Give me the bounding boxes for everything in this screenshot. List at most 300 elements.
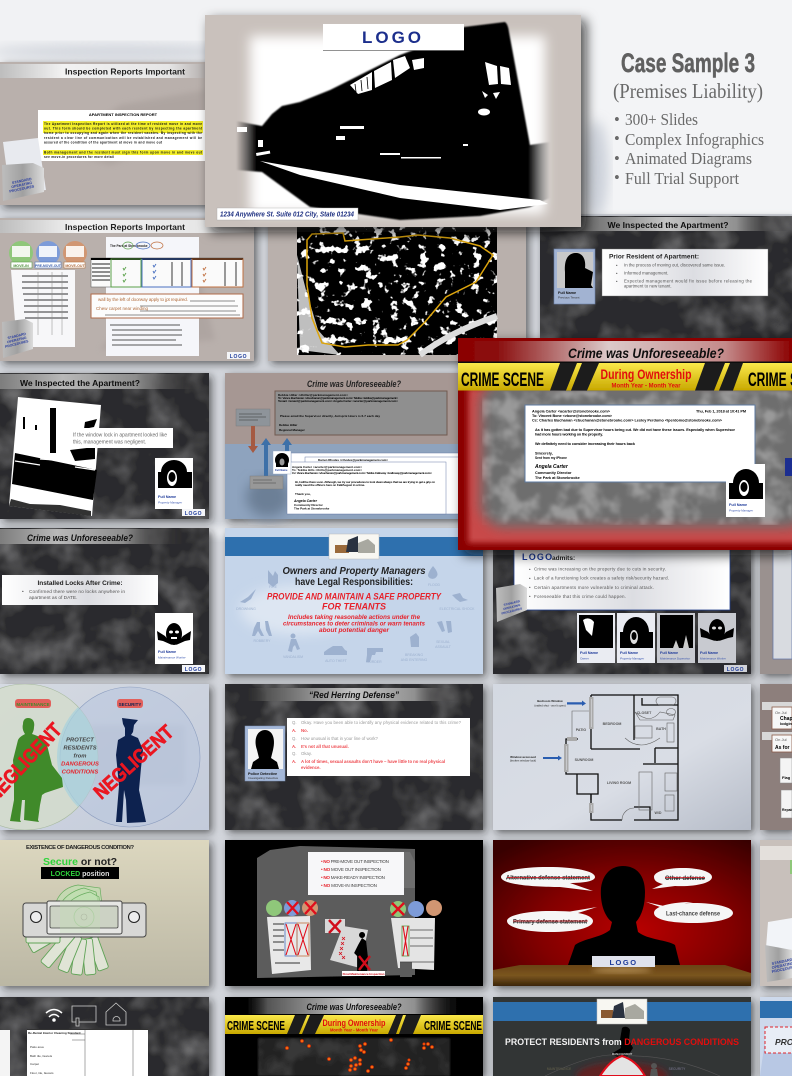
form documents: Re-Rental Interior Cleaning Standard xyxy=(28,1031,81,1035)
email stack: Angela Carter <acarter@parkmanagement.com> xyxy=(292,465,362,469)
question and answer testimony: No. xyxy=(301,728,308,733)
card: property manager: Full Name xyxy=(620,651,638,655)
triangle diagram xyxy=(545,1052,720,1076)
faint hazard icons: ROBBERY xyxy=(253,639,271,643)
title bar: Crime was Unforeseeable? xyxy=(306,1002,402,1012)
admits box: • xyxy=(529,594,531,599)
lock body xyxy=(23,900,146,937)
faint hazard icons xyxy=(236,566,475,664)
maintenance pill: MAINTENANCE xyxy=(16,702,50,707)
form documents: Carpet xyxy=(30,1062,39,1066)
question and answer testimony: A. xyxy=(292,728,296,733)
admits box: Crime was increasing on the property due to cuts in security. xyxy=(534,566,666,572)
binder: PROCEDURES xyxy=(5,339,30,349)
title bar xyxy=(0,529,190,544)
email: gray background xyxy=(275,391,447,435)
arrow: bedroom window: (nailed shut - won't open) xyxy=(534,704,566,708)
heading: Owners and Property Managers xyxy=(282,566,426,577)
speech bubble: alternative defense: Alternative defense statement xyxy=(506,876,590,882)
paper xyxy=(766,918,792,950)
installed locks box: • xyxy=(22,590,24,595)
faint hazard icons: ELECTRICAL SHOCK xyxy=(440,607,475,611)
negligent stamp right: NEGLIGENT xyxy=(90,721,178,804)
question and answer testimony: Q. xyxy=(292,751,297,756)
faint hazard icons: FLOOD xyxy=(428,583,440,587)
binder: OPERATING xyxy=(7,336,27,344)
security guard silhouette xyxy=(116,718,146,823)
right circle xyxy=(60,687,200,827)
small gray note lower xyxy=(250,476,283,489)
slide: existence of dangerous condition xyxy=(0,840,209,986)
blue band xyxy=(493,1002,751,1021)
feature list: • xyxy=(614,168,620,187)
admits box: Certain apartments more vulnerable to criminal attack. xyxy=(534,585,654,590)
email stack: Cc: Vance Buchanan <vbuchanan@parkmanagement.com> Tekiba Calloway <tcalloway@parkmanagement.com> xyxy=(292,471,432,475)
slide: we inspected the apartment, window photo xyxy=(0,373,209,519)
venn center text: DANGEROUS xyxy=(61,762,99,768)
email: gray background: Please email the Supervisor directly, Jurisprix Hours is 6-7 each day xyxy=(280,414,380,418)
slide: crime map during ownership xyxy=(225,997,483,1076)
email stack: The Park at Stonebrooke xyxy=(294,506,330,510)
profile card small xyxy=(273,451,291,474)
logo tag xyxy=(182,665,205,673)
feature list: • xyxy=(614,129,620,148)
slide: small email cards xyxy=(760,684,792,830)
heading: PROTECT RESIDENTS from DANGEROUS CONDITIONS xyxy=(505,1037,739,1048)
slide: small email cards: Flag xyxy=(782,775,791,780)
room labels: CLOSET xyxy=(637,711,652,715)
prior resident statement: Informed management. xyxy=(624,270,668,276)
icon: gavel and houses xyxy=(329,534,379,559)
feature list: Complex Infographics xyxy=(625,130,764,149)
maintenance pill xyxy=(15,699,51,708)
prior resident statement: apartment to new tenant. xyxy=(624,284,672,288)
crime was unforeseeable: featured slide xyxy=(458,338,792,550)
question and answer testimony: It's not all that unusual. xyxy=(301,744,349,749)
move-out comments box: Chew carpet near winding xyxy=(96,306,149,311)
card: owner xyxy=(577,613,615,663)
maintenance inspection paper: Final Maintenance Inspection xyxy=(343,972,385,976)
no inspection list: • NO MOVE OUT INSPECTION xyxy=(321,867,381,872)
red statement xyxy=(267,592,442,612)
move-in badge: MOVE-IN xyxy=(13,264,29,268)
form documents: Floor, tile, faucets xyxy=(30,1071,54,1075)
profile card: property manager: Full Name xyxy=(158,495,176,499)
form documents: Bath tile, faucets xyxy=(30,1054,53,1058)
question and answer testimony: evidence. xyxy=(301,765,321,770)
move-out badge xyxy=(63,241,87,268)
card: property manager xyxy=(617,613,655,663)
slide: small email cards: As for xyxy=(775,745,790,751)
title bar: “Red Herring Defense” xyxy=(309,690,399,700)
card: police detective: Police Detective xyxy=(248,772,277,776)
email stack: To: Tekiba Hills <thills@parkmanagement.com> xyxy=(292,468,362,472)
floor plan xyxy=(565,695,678,820)
faint hazard icons: AND ENTERING xyxy=(401,658,427,662)
arrow: brown down xyxy=(248,426,258,453)
heading: have Legal Responsibilities: xyxy=(295,577,413,588)
installed locks box: apartment as of DATE. xyxy=(29,595,77,601)
venn center text: from xyxy=(74,754,86,760)
binder: PROCEDURES xyxy=(501,607,523,616)
arrow: blue up right xyxy=(282,438,292,462)
logo box: LOGO xyxy=(362,28,424,47)
email: We definitely need to consider increasing their hours back xyxy=(535,442,636,446)
room labels: BEDROOM xyxy=(603,722,621,726)
slide: inspection reports important (top) xyxy=(0,62,210,205)
speech bubble: last-chance defense: Last-chance defense xyxy=(666,912,721,918)
wood table xyxy=(493,965,751,986)
silhouette behind heading xyxy=(611,1027,633,1060)
crime scene tape: During Ownership xyxy=(322,1018,386,1029)
binder xyxy=(496,584,527,622)
speech bubble: alternative defense xyxy=(501,867,595,891)
pre-move-out badge xyxy=(35,241,61,268)
apartment inspection report document: resident a clear line of communication will be established and management will be xyxy=(44,136,202,140)
security pill: SECURITY xyxy=(119,702,141,707)
venn center text xyxy=(61,738,99,776)
admits box: Foreseeable that this crime could happen. xyxy=(534,594,626,599)
gray floor shape xyxy=(257,846,415,978)
slide: inspection reports with forms xyxy=(0,218,254,361)
room labels: W/D xyxy=(654,811,662,815)
email: gray background: Debbie Hillar <dhillar@parkmanagement.com> xyxy=(278,393,348,397)
arrow: bedroom window: Bedroom Window xyxy=(537,699,563,703)
binder xyxy=(2,319,33,358)
no inspection list xyxy=(308,852,404,895)
question and answer testimony: Q. xyxy=(292,736,297,741)
binder and paper: STANDARD xyxy=(12,177,32,185)
installed locks box: Installed Locks After Crime: xyxy=(38,580,122,587)
slide: defense statements silhouette xyxy=(493,840,751,986)
title bar xyxy=(540,217,792,231)
apartment inspection report document: out. This form should be completed with each resident by inspecting the apartment xyxy=(44,126,203,130)
email stack: Angela Carter xyxy=(293,499,318,503)
aerial photo with property boundary xyxy=(297,227,497,355)
locked position label xyxy=(41,867,119,879)
feature list: • xyxy=(614,149,620,168)
prior resident statement: • xyxy=(616,279,618,284)
center inspection form: The Park at Stonebrooke xyxy=(110,244,148,248)
card: maintenance supervisor: Full Name xyxy=(660,651,678,655)
no inspection list: • NO PRE-MOVE OUT INSPECTION xyxy=(321,859,389,864)
move-out comments box: wall by the left of doorway apply to jpt required. xyxy=(98,297,188,302)
admits box: • xyxy=(529,567,531,572)
email stack: Community Director xyxy=(294,503,324,507)
email: Sincerely, xyxy=(535,452,553,456)
slide: dashed protect box xyxy=(760,997,792,1076)
defendant silhouette xyxy=(568,866,680,965)
slide: binder and document crop xyxy=(760,840,792,986)
logo tag: LOGO xyxy=(727,667,744,673)
no inspection list: • NO MOVE-IN INSPECTION xyxy=(321,883,377,888)
move-in badge xyxy=(9,241,33,268)
speech bubble: primary defense xyxy=(507,907,597,932)
logo tag xyxy=(182,509,205,517)
card: police detective xyxy=(245,726,285,781)
profile card: maintenance worker: Maintenance Worker xyxy=(158,656,187,660)
overlap xyxy=(57,707,98,807)
left inspection form xyxy=(11,270,75,347)
email: gray background: Tenant <tenant@parkmanagement.com> Angela Carter <acarter@parkmanagement.com> xyxy=(278,399,398,403)
email: Cc: Charles Buchanan <cbuchanan@stonebrooke.com> Lesley Perdomo <lperdomo@stonebrooke.com> xyxy=(532,418,723,422)
feature list xyxy=(614,110,764,188)
red statement: FOR TENANTS xyxy=(322,602,386,612)
crime scene tape: CRIME SCENE xyxy=(461,370,544,391)
question and answer testimony: A. xyxy=(292,759,296,764)
card: maintenance worker: Maintenance Worker xyxy=(700,656,727,660)
address box: 1234 Anywhere St. Suite 012 City, State 01234 xyxy=(220,210,354,218)
venn center text: RESIDENTS xyxy=(63,746,97,752)
card: maintenance worker xyxy=(698,613,736,663)
apartment inspection report document: home prior to occupying and again when the resident vacates. By inspecting with the xyxy=(44,131,202,135)
slide: logo admits xyxy=(493,528,751,674)
profile card: property manager xyxy=(155,458,193,509)
security pill xyxy=(117,699,143,708)
window lock photo xyxy=(9,397,101,516)
red detail text: about potential danger xyxy=(319,627,389,634)
question and answer testimony: Okay. xyxy=(301,751,312,756)
speech bubble: other defense xyxy=(652,868,712,889)
installed locks box: Confirmed there were no locks anywhere in xyxy=(29,589,125,595)
slide: crime was unforeseeable, installed locks xyxy=(0,528,209,674)
faint hazard icons: AUTO THEFT xyxy=(325,659,348,663)
lock with rotating key fan xyxy=(23,885,146,975)
left badges and form with X marks xyxy=(266,900,318,974)
slide: protect residents from dangerous conditions xyxy=(493,997,751,1076)
binder: STANDARD xyxy=(503,599,521,607)
card: maintenance supervisor: Maintenance Supervisor xyxy=(660,656,691,660)
question and answer testimony: A lot of times, sexual assaults don't have – have little to no real physical xyxy=(301,759,445,764)
card: owner: Full Name xyxy=(580,651,598,655)
title bar xyxy=(0,64,210,78)
callout: window lock: If the window lock in apartment looked like xyxy=(73,432,167,438)
title bar: Inspection Reports Important xyxy=(65,66,185,76)
email: Community Director xyxy=(535,471,572,475)
slide: we inspected the apartment, prior resident xyxy=(540,216,792,352)
crime scene tape xyxy=(458,363,792,391)
title bar: We Inspected the Apartment? xyxy=(20,378,140,388)
faint hazard icons: SEXUAL xyxy=(436,640,450,644)
apartment inspection report document: see move-in procedures for more detail xyxy=(44,155,114,159)
admits box: admits: xyxy=(552,555,575,562)
slide: small email cards: On Jul xyxy=(775,737,787,742)
arrow: window accessed: (broken window lock) xyxy=(510,758,536,762)
apartment inspection report document: assured of the condition of the apartment at move in and move out xyxy=(44,140,163,144)
title bar: We Inspected the Apartment? xyxy=(608,220,728,230)
title bar: Crime was Unforeseeable? xyxy=(568,345,724,361)
room labels: LIVING ROOM xyxy=(607,781,631,785)
move-out badge: MOVE-OUT xyxy=(65,264,85,268)
crime scene tape: Month Year - Month Year xyxy=(612,382,681,390)
email: gray background: To: Vance Buchanan <vbuchanan@parkmanagement.com> Tekiba <tekiba@parkmanagement> xyxy=(278,396,398,400)
question and answer testimony: How unusual is that in your line of work? xyxy=(301,736,379,741)
heading xyxy=(282,566,426,588)
slide: small email cards: lodgin xyxy=(780,721,792,726)
binder and paper: OPERATING xyxy=(11,181,33,189)
slide: owners and property managers legal responsibilities xyxy=(225,528,483,674)
icon: house alarm xyxy=(106,1003,126,1025)
email stack: Hi, I will be there soon. Although, we try our procedures to look clean always that we are trying to get a grip on xyxy=(295,480,435,484)
maintenance inspection paper xyxy=(325,919,385,976)
no inspection list: • NO MAKE-READY INSPECTION xyxy=(321,875,385,880)
apartment inspection report document: APARTMENT INSPECTION REPORT xyxy=(89,112,158,117)
feature list: • xyxy=(614,110,620,129)
binder: STANDARD xyxy=(7,332,27,340)
card: maintenance worker: Full Name xyxy=(700,651,718,655)
slide: small email cards: On Jul xyxy=(775,710,787,715)
title bar: Crime was Unforeseeable? xyxy=(27,533,133,543)
arrow: window accessed xyxy=(510,755,562,762)
slide: apartment floor plan xyxy=(493,684,751,830)
card: police detective: Investigating Detective xyxy=(248,776,279,780)
prior resident statement: • xyxy=(616,271,618,276)
question and answer testimony: Q. xyxy=(292,720,297,725)
crime scene tape: CRIME SCENE xyxy=(424,1018,482,1033)
email: gray background: Debbie Hillar xyxy=(279,423,298,427)
speech bubble: last-chance defense xyxy=(646,902,733,923)
crime scene tape: CRIME SCENE xyxy=(227,1018,285,1033)
prior resident statement: • xyxy=(616,263,618,268)
question and answer testimony xyxy=(287,718,470,776)
maintenance worker silhouette xyxy=(10,718,63,822)
card: owner: Owner xyxy=(580,656,590,660)
prior resident statement: In the process of moving out, discovered same issue. xyxy=(624,262,725,268)
form documents xyxy=(0,1029,148,1076)
blue band xyxy=(225,537,483,556)
venn center text: PROTECT xyxy=(66,738,94,744)
right form with badges xyxy=(390,852,442,977)
left circle xyxy=(0,684,98,830)
profile card: property manager: Property Manager xyxy=(158,500,183,504)
feature list: 300+ Slides xyxy=(625,110,698,129)
title bar xyxy=(458,341,792,363)
question and answer testimony: Okay. Have you been able to identify any physical evidence related to this crime? xyxy=(301,720,462,725)
checklist table xyxy=(91,258,243,287)
logo tag: LOGO xyxy=(230,354,247,360)
apartment inspection report document: The Apartment Inspection Report is utilized at the time of resident move in and move xyxy=(44,122,202,126)
logo tag xyxy=(724,665,747,673)
hero slide: building with logo xyxy=(205,15,581,227)
logo tag xyxy=(227,352,250,360)
profile card: property manager: Full Name xyxy=(729,503,747,507)
title bar xyxy=(246,688,462,701)
logo plaque xyxy=(592,956,655,967)
prior resident statement: Prior Resident of Apartment: xyxy=(609,254,699,260)
profile card: previous tenant xyxy=(554,249,595,304)
faint hazard icons: DROWNING xyxy=(236,607,256,611)
locked position label: LOCKED position xyxy=(51,871,109,878)
binder: OPERATING xyxy=(503,603,521,611)
faint hazard icons: MURDER xyxy=(366,660,382,664)
slide: aerial map xyxy=(268,218,526,361)
binder xyxy=(765,945,792,982)
logo tag: LOGO xyxy=(185,667,202,673)
email: Sent from my iPhone xyxy=(535,456,567,460)
apartment inspection report document: Both management and the resident must sign this form upon move in and move out xyxy=(44,150,203,154)
prior resident statement xyxy=(602,249,768,296)
email: The Park at Stonebrooke xyxy=(535,476,580,480)
installed locks box xyxy=(2,575,158,605)
room labels: SUNROOM xyxy=(575,758,593,762)
red statement: PROVIDE AND MAINTAIN A SAFE PROPERTY xyxy=(267,592,442,602)
logo plaque: LOGO xyxy=(609,958,638,967)
form documents: Patio area xyxy=(30,1045,44,1049)
triangle diagram: MANAGEMENT xyxy=(612,1052,632,1056)
callout: window lock: this, management was negligent. xyxy=(73,440,146,446)
icon: television xyxy=(72,1006,96,1026)
email: gray background: Regional Manager xyxy=(279,428,306,432)
profile card: property manager xyxy=(726,464,765,517)
aerial map with crime markers xyxy=(258,1038,450,1076)
slide: bottom left forms and devices xyxy=(0,997,209,1076)
triangle diagram: SECURITY xyxy=(669,1067,686,1071)
admits box: LOGO xyxy=(522,552,553,562)
title bar: Inspection Reports Important xyxy=(65,222,185,232)
arrow: window accessed: Window accessed xyxy=(510,755,536,759)
faint hazard icons: ASSAULT xyxy=(435,645,452,649)
profile card: previous tenant: Previous Tenant xyxy=(558,296,580,300)
card: property manager: Property Manager xyxy=(620,656,645,660)
crime scene tape xyxy=(225,1015,483,1034)
email: Angela Carter xyxy=(534,464,569,470)
slide: crime was unforeseeable, emails xyxy=(225,373,483,519)
title: Crime was Unforeseeable? xyxy=(307,379,401,389)
room labels xyxy=(575,711,666,815)
room labels: PATIO xyxy=(576,728,586,732)
pre-move-out badge: PRE-MOVE-OUT xyxy=(35,264,61,268)
move-out comments box xyxy=(91,294,243,318)
faint hazard icons: VANDALISM xyxy=(283,655,303,659)
admits box xyxy=(514,540,730,610)
email xyxy=(525,405,755,482)
secure or not: Secure or not? xyxy=(43,856,117,868)
slide: no inspections xyxy=(225,840,483,986)
icon: gavel and houses xyxy=(597,999,647,1024)
aerial crime map xyxy=(468,380,792,543)
question and answer testimony: A. xyxy=(292,744,296,749)
email stack: Thank you, xyxy=(295,492,311,496)
email: To: Vincent Bone <vbone@stonebrooke.com> xyxy=(532,414,613,418)
subheading: premises liability: (Premises Liability) xyxy=(613,79,763,103)
slide: venn diagram negligent xyxy=(0,684,209,830)
profile card: maintenance worker xyxy=(155,613,193,664)
small gray note xyxy=(236,409,270,426)
speech bubble: other defense: Other defense xyxy=(665,876,706,882)
callout: window lock xyxy=(65,428,173,448)
profile card: previous tenant: Full Name xyxy=(558,291,576,295)
address box xyxy=(217,208,358,220)
email stack: really need the officers here on Fall/August in a time. xyxy=(295,483,365,487)
title bar xyxy=(246,998,462,1014)
red detail text: circumstances to deter criminals or warn tenants xyxy=(283,620,425,628)
profile card: property manager: Property Manager xyxy=(729,508,754,512)
admits box: • xyxy=(529,585,531,590)
room labels: BATH xyxy=(656,727,666,731)
prior resident statement: Expected management would fix issue before releasing the xyxy=(624,278,753,284)
faint hazard icons: BREAKING xyxy=(405,653,423,657)
crime scene tape: During Ownership xyxy=(600,366,692,382)
speech bubble: primary defense: Primary defense statement xyxy=(513,920,587,926)
faint hazard icons: FIRE xyxy=(269,585,278,589)
center inspection form xyxy=(106,237,199,356)
email stack: Darren Rhodes <rrhodes@parkmanagement.com> xyxy=(318,458,388,462)
triangle diagram: MAINTENANCE xyxy=(547,1067,572,1071)
apartment inspection report document xyxy=(38,110,206,161)
arrow: blue up left xyxy=(261,438,271,479)
heading: case sample 3 xyxy=(613,48,763,103)
email: Angela Carter <acarter@stonebrooke.com> xyxy=(532,410,611,414)
